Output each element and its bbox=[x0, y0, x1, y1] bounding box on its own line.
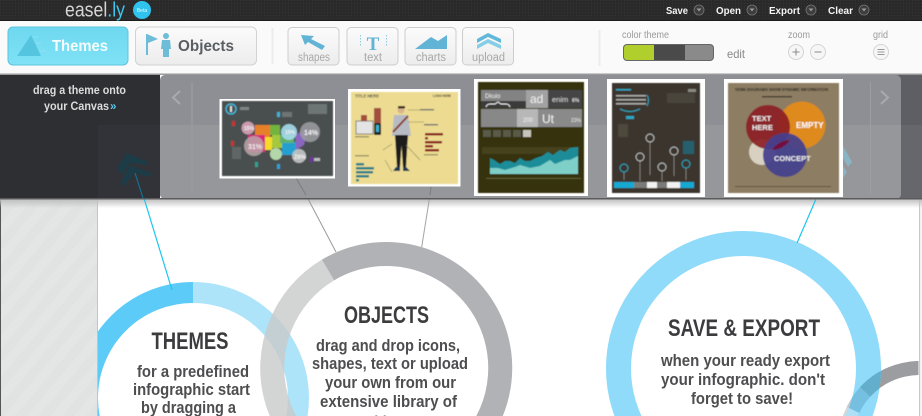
line behind drawer bbox=[135, 173, 143, 198]
thumbnail: map theme: 15% bbox=[285, 130, 296, 136]
text: themes description bbox=[133, 363, 250, 416]
text: themes description: infographic start bbox=[133, 381, 250, 399]
canvas bbox=[98, 199, 922, 416]
button: shapes: shapes bbox=[298, 52, 330, 64]
zoom control bbox=[788, 29, 826, 60]
thumbnail: chart theme: Ut bbox=[542, 112, 555, 126]
arrow: next bbox=[881, 91, 888, 104]
button: charts bbox=[405, 28, 456, 65]
button: objects bbox=[136, 27, 256, 65]
thumbnail: chart theme bbox=[474, 79, 588, 196]
button: text: T bbox=[367, 34, 380, 55]
thumbnail: map theme: 15% bbox=[244, 126, 255, 132]
button: charts: charts bbox=[416, 52, 446, 64]
text: drag a theme: » bbox=[110, 101, 116, 113]
text: drag a theme: your Canvas bbox=[44, 101, 109, 113]
text: drag a theme bbox=[33, 85, 126, 113]
beta badge bbox=[133, 1, 151, 19]
connector lines bbox=[143, 195, 816, 290]
text: objects description: shapes, text or upload bbox=[312, 355, 468, 373]
top bar bbox=[0, 0, 922, 21]
thumbnail: venn theme: TEXT bbox=[752, 114, 772, 123]
theme drawer background bbox=[0, 75, 922, 200]
thumbnail: person theme bbox=[348, 89, 460, 186]
text: drag a theme: drag a theme onto bbox=[33, 85, 126, 97]
button: objects: Objects bbox=[178, 38, 234, 55]
icon: canvas chevrons behind drawer bbox=[117, 153, 151, 187]
thumbnail: venn theme: CONCEPT bbox=[774, 154, 811, 163]
text: themes description: for a predefined bbox=[137, 363, 249, 381]
logo: easel.ly bbox=[65, 0, 125, 22]
button: upload: upload bbox=[472, 52, 505, 64]
thumbnail: chart theme: 6% bbox=[572, 98, 580, 104]
button: text bbox=[347, 28, 398, 65]
drawer connector lines bbox=[296, 178, 431, 195]
thumbnail: venn theme: VENN DIAGRAMS SHOW DYNAMIC INFORMATION bbox=[735, 87, 828, 93]
ring overlap bbox=[846, 370, 881, 416]
thumbnail: chart theme: 23% bbox=[571, 118, 582, 124]
thumbnail: person theme: LOGO HERE bbox=[433, 94, 452, 98]
grid control: grid bbox=[873, 29, 888, 41]
arrow: previous bbox=[173, 91, 180, 104]
thumbnail: venn theme: EMPTY bbox=[796, 121, 824, 130]
left sidebar bbox=[0, 199, 98, 416]
thumbnail: chart theme: 200 bbox=[523, 118, 534, 124]
thumbnail: venn theme bbox=[724, 79, 843, 197]
top menu: Clear bbox=[828, 5, 853, 17]
text: save description: when your ready export bbox=[660, 352, 830, 370]
thumbnail: map theme bbox=[220, 99, 335, 178]
text: objects description bbox=[312, 337, 468, 416]
top menu bbox=[666, 5, 869, 17]
thumbnail: chart theme: Dkuio bbox=[485, 94, 501, 100]
text: objects description: your own from our bbox=[325, 374, 457, 392]
thumbnail: map theme: 14% bbox=[304, 130, 319, 137]
color theme control: color theme bbox=[622, 29, 669, 41]
button: upload bbox=[462, 28, 514, 65]
text: save description bbox=[660, 352, 830, 408]
top menu: Export bbox=[769, 5, 800, 17]
grid control bbox=[873, 29, 888, 60]
icon: faint chevron in drawer bbox=[843, 146, 852, 178]
toolbar bbox=[0, 21, 922, 75]
thumbnail: chart theme: enim bbox=[552, 95, 568, 104]
top menu: Open bbox=[716, 5, 741, 17]
ring: themes bbox=[88, 292, 299, 416]
top menu: Save bbox=[666, 5, 688, 17]
panel shadow bbox=[0, 199, 922, 208]
text: save description: forget to save! bbox=[691, 390, 793, 408]
text: save description: your infographic. don't bbox=[661, 371, 825, 389]
color theme control: edit bbox=[727, 47, 746, 61]
beta badge: Beta bbox=[137, 8, 147, 14]
heading: save and export: SAVE & EXPORT bbox=[668, 315, 820, 342]
button: text: text bbox=[364, 52, 383, 64]
button: shapes bbox=[288, 28, 339, 65]
thumbnail: chart theme: ad bbox=[530, 92, 543, 106]
thumbnail: person theme: TITLE HERE bbox=[355, 94, 379, 98]
thumbnail: venn theme: HERE bbox=[752, 123, 773, 132]
ring: save and export bbox=[618, 244, 868, 416]
button: themes: Themes bbox=[52, 38, 108, 55]
thumbnail: map theme: 31% bbox=[248, 144, 263, 151]
ring: next step bbox=[845, 368, 922, 416]
ring: objects bbox=[272, 254, 500, 416]
heading: themes: THEMES bbox=[152, 328, 228, 355]
text: objects description: extensive library of bbox=[320, 393, 457, 411]
button: themes bbox=[8, 27, 128, 65]
heading: objects: OBJECTS bbox=[344, 302, 429, 329]
zoom control: zoom bbox=[788, 29, 810, 41]
text: objects description: drag and drop icons, bbox=[316, 337, 460, 355]
color theme control bbox=[622, 29, 746, 61]
thumbnail: map theme: 26% bbox=[294, 155, 307, 161]
thumbnail: timeline theme bbox=[607, 79, 705, 197]
